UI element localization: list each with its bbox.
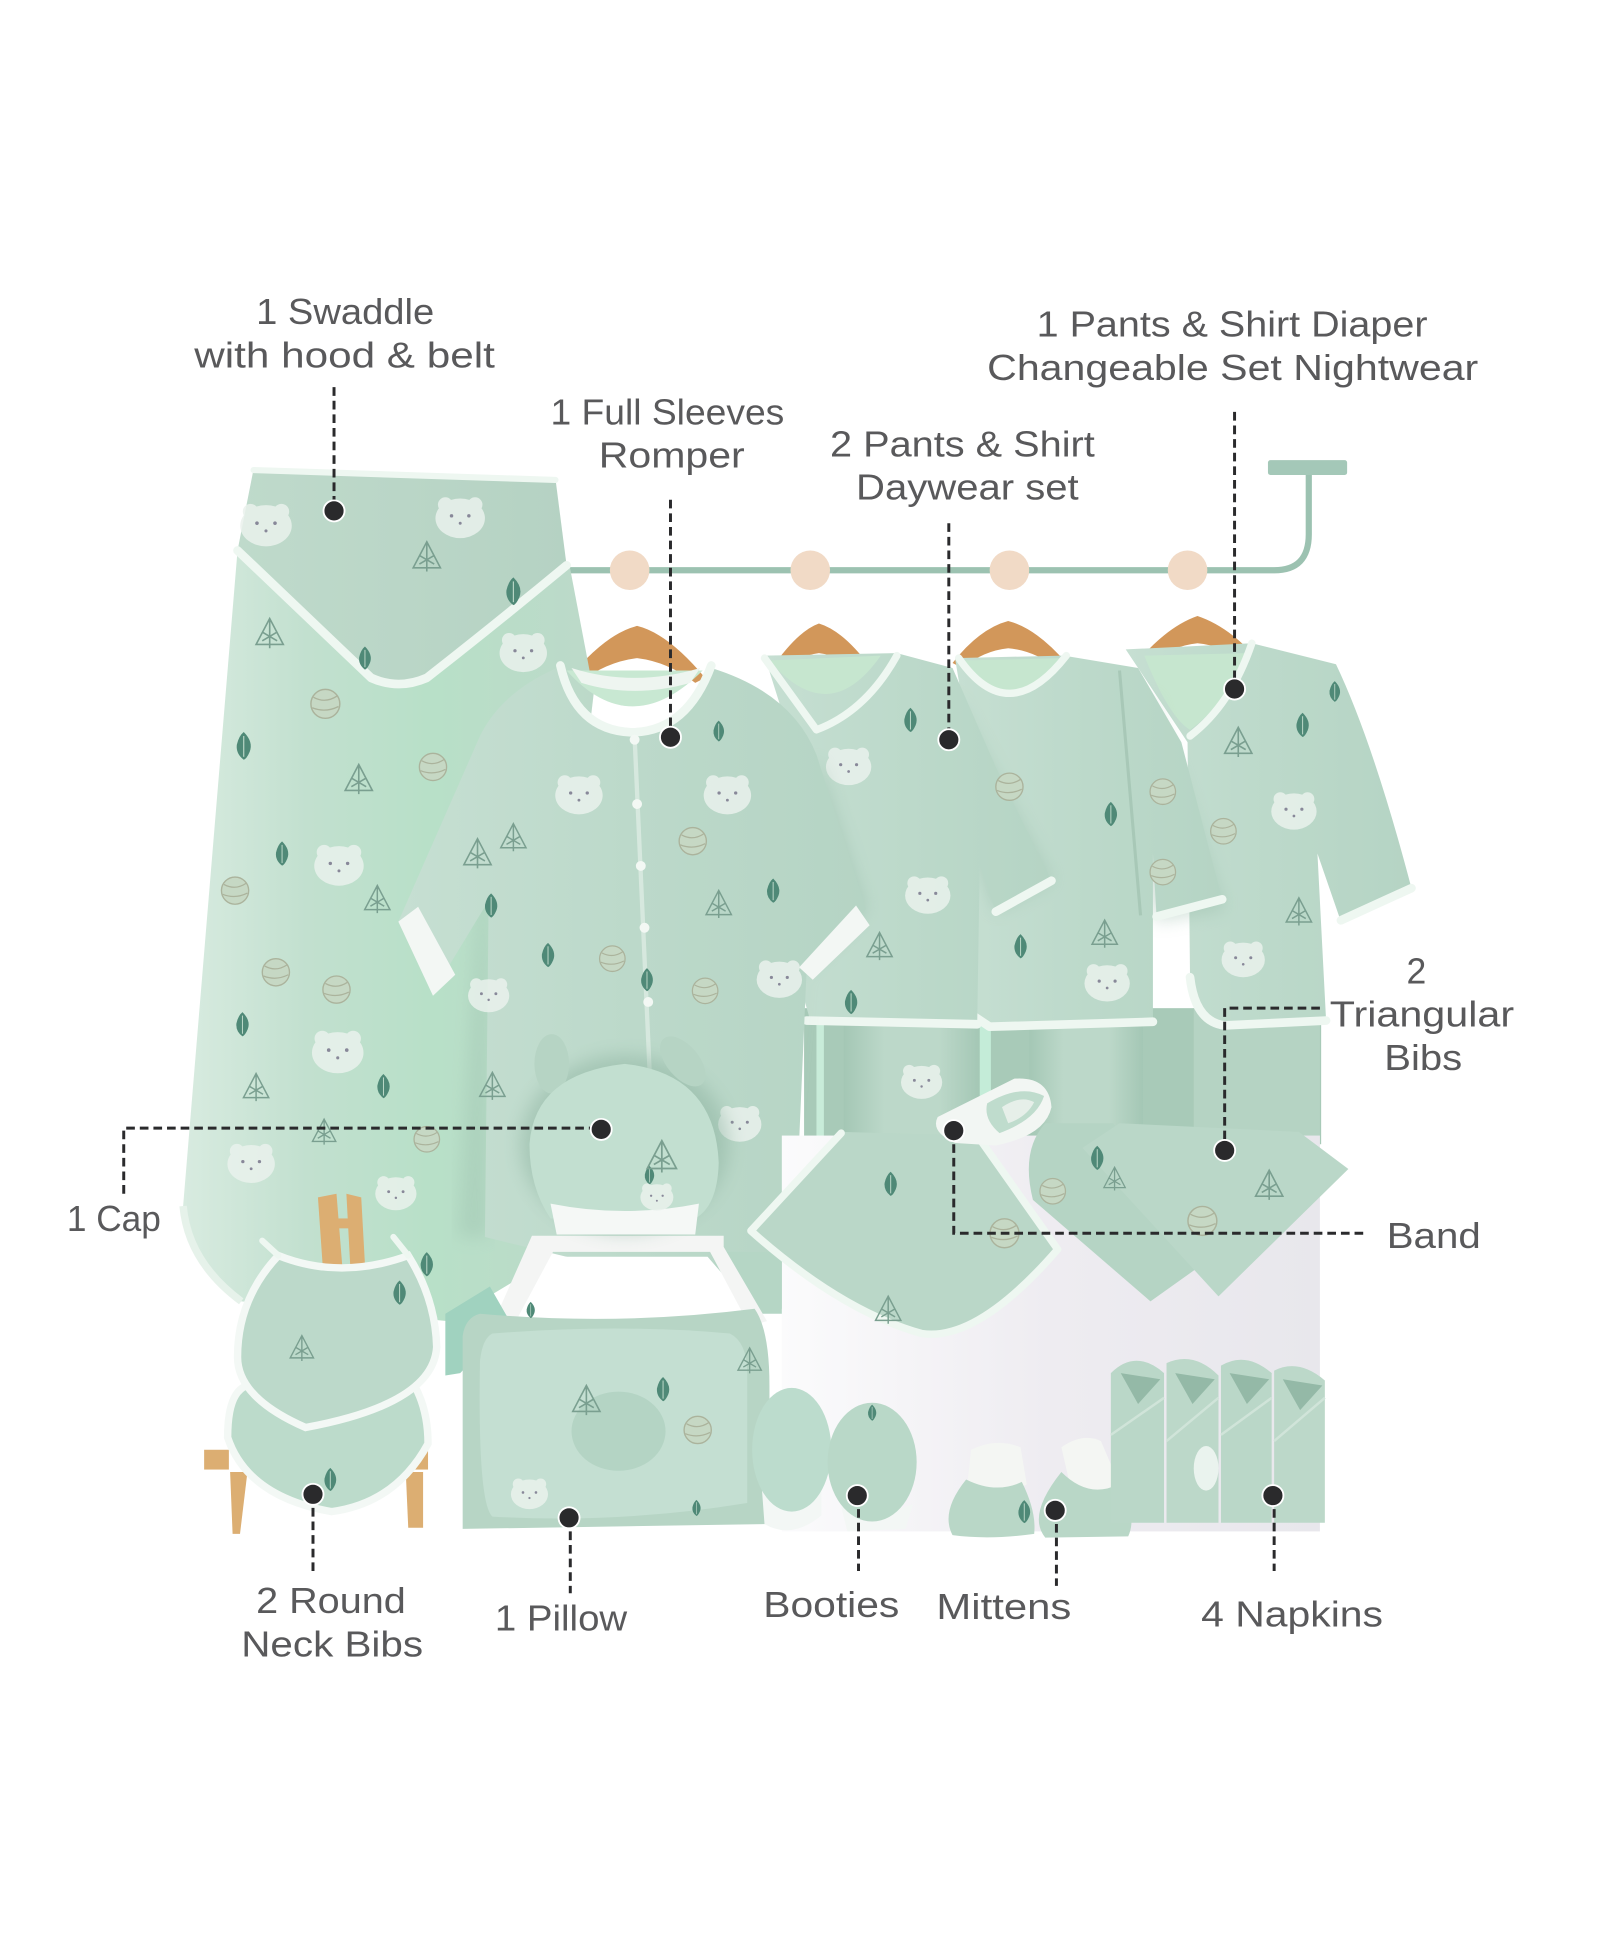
label: 2 Pants & Shirt Daywear set: Daywear set (856, 468, 1079, 508)
pillow (463, 1302, 769, 1529)
rolled band (936, 1078, 1051, 1145)
easel (204, 1194, 428, 1534)
label: 1 Pillow (495, 1507, 627, 1638)
label: 1 Swaddle with hood & belt: with hood & belt (193, 335, 495, 375)
round neck bibs (228, 1237, 437, 1512)
shirt: nightwear right (1126, 643, 1411, 1027)
white stool (445, 1236, 782, 1376)
label: 1 Cap (67, 1119, 612, 1239)
label: 1 Full Sleeves Romper (550, 392, 784, 748)
label: 2 Round Neck Bibs: 2 Round (256, 1581, 406, 1621)
romper with full sleeves (398, 666, 870, 1311)
label: 1 Swaddle with hood & belt (193, 292, 495, 521)
label: 1 Pants & Shirt Diaper Changeable Set Nightwear: Changeable Set Nightwear (987, 348, 1478, 388)
label: 1 Swaddle with hood & belt: 1 Swaddle (256, 292, 434, 332)
shirt: daywear left (764, 653, 1051, 1024)
label: 2 Pants & Shirt Daywear set: 2 Pants & Shirt (830, 424, 1095, 464)
shirt: daywear middle (955, 656, 1225, 1029)
label: Band: Band (1387, 1216, 1481, 1256)
label: Band (943, 1120, 1481, 1256)
label: Mittens (936, 1500, 1071, 1627)
large bib on the box (751, 1132, 1058, 1334)
label: 2 Round Neck Bibs (241, 1484, 423, 1664)
white display box (782, 1136, 1320, 1531)
label: 2 Triangular Bibs: Triangular (1330, 995, 1514, 1035)
label: 2 Triangular Bibs: Bibs (1384, 1038, 1462, 1078)
label: Mittens: Mittens (936, 1587, 1071, 1627)
swaddle blanket with hood (183, 469, 594, 1321)
label: 1 Pants & Shirt Diaper Changeable Set Nightwear (987, 304, 1478, 700)
cap with ears (521, 1028, 729, 1235)
label: 2 Triangular Bibs (1214, 951, 1514, 1161)
label: Booties (763, 1485, 899, 1625)
label: Booties: Booties (763, 1585, 899, 1625)
wooden hangers (569, 616, 1254, 683)
label: 1 Full Sleeves Romper: 1 Full Sleeves (550, 392, 784, 432)
label: 2 Triangular Bibs: 2 (1407, 951, 1426, 991)
label: 2 Round Neck Bibs: Neck Bibs (241, 1624, 423, 1664)
triangular bibs (1029, 1123, 1348, 1301)
label: 1 Pillow: 1 Pillow (495, 1598, 627, 1638)
label: 4 Napkins (1201, 1485, 1383, 1635)
label: 2 Pants & Shirt Daywear set (830, 424, 1095, 750)
label: 1 Pants & Shirt Diaper Changeable Set Nightwear: 1 Pants & Shirt Diaper (1037, 304, 1428, 344)
mittens pair (949, 1438, 1131, 1538)
pants hanging below the shirts (804, 1008, 1321, 1144)
napkins (1111, 1359, 1325, 1523)
label: 4 Napkins: 4 Napkins (1201, 1595, 1383, 1635)
booties pair (752, 1388, 917, 1531)
clothes rack (563, 460, 1347, 590)
label: 1 Full Sleeves Romper: Romper (599, 436, 745, 476)
label: 1 Cap: 1 Cap (67, 1199, 161, 1239)
